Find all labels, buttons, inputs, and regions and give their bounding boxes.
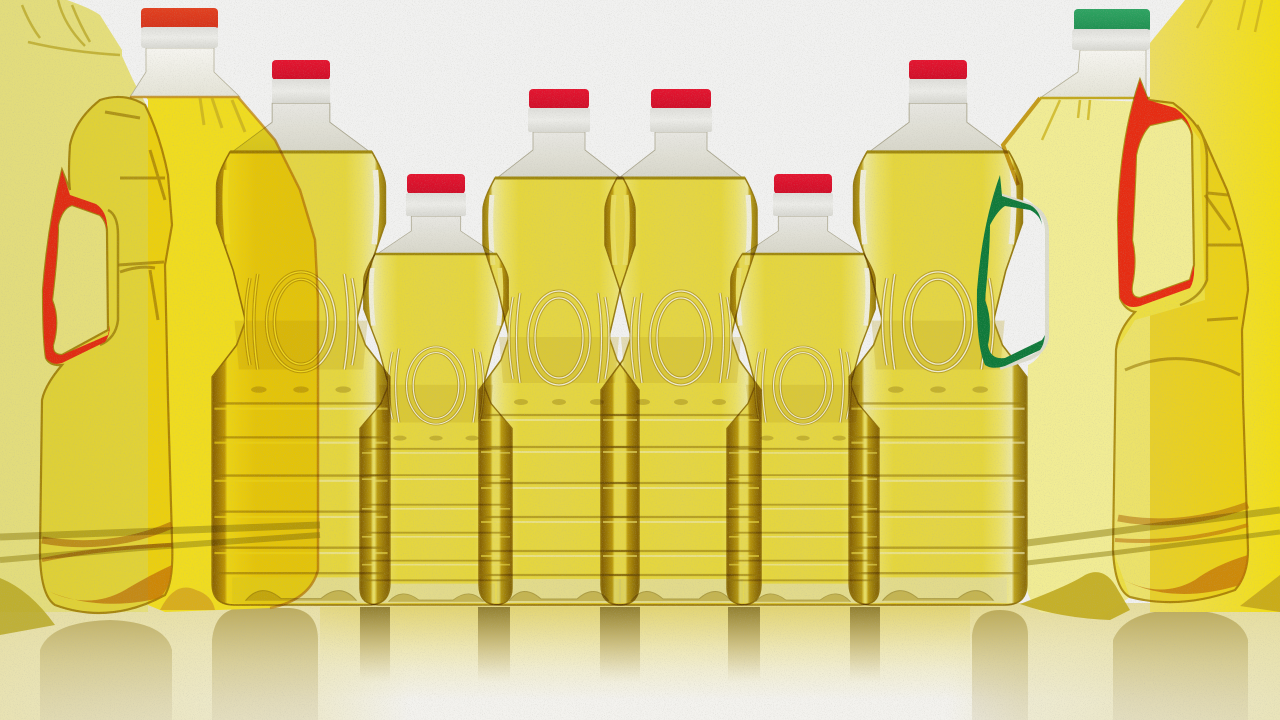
red handle, front right [1118,80,1194,307]
red handle, front left [43,170,110,364]
bottle far left [0,0,148,635]
small bottle right [727,174,879,605]
side-facing bottle, front right [1113,80,1248,602]
tall bottle right [849,60,1027,605]
medium bottle left of centre [479,89,639,605]
diagonal oil surface streaks [0,510,1280,563]
side-facing bottle, front left [40,97,172,613]
bottle far right [1150,0,1280,612]
tall bottle left [212,60,390,605]
bottle with orange cap, back left [130,8,318,612]
reflection of bottles on floor [40,607,1248,720]
bottle with green cap, back right [1003,9,1205,620]
floor reflection wash [0,603,1280,720]
medium bottle right of centre [601,89,761,605]
green handle [977,175,1047,368]
small bottle left [360,174,512,605]
